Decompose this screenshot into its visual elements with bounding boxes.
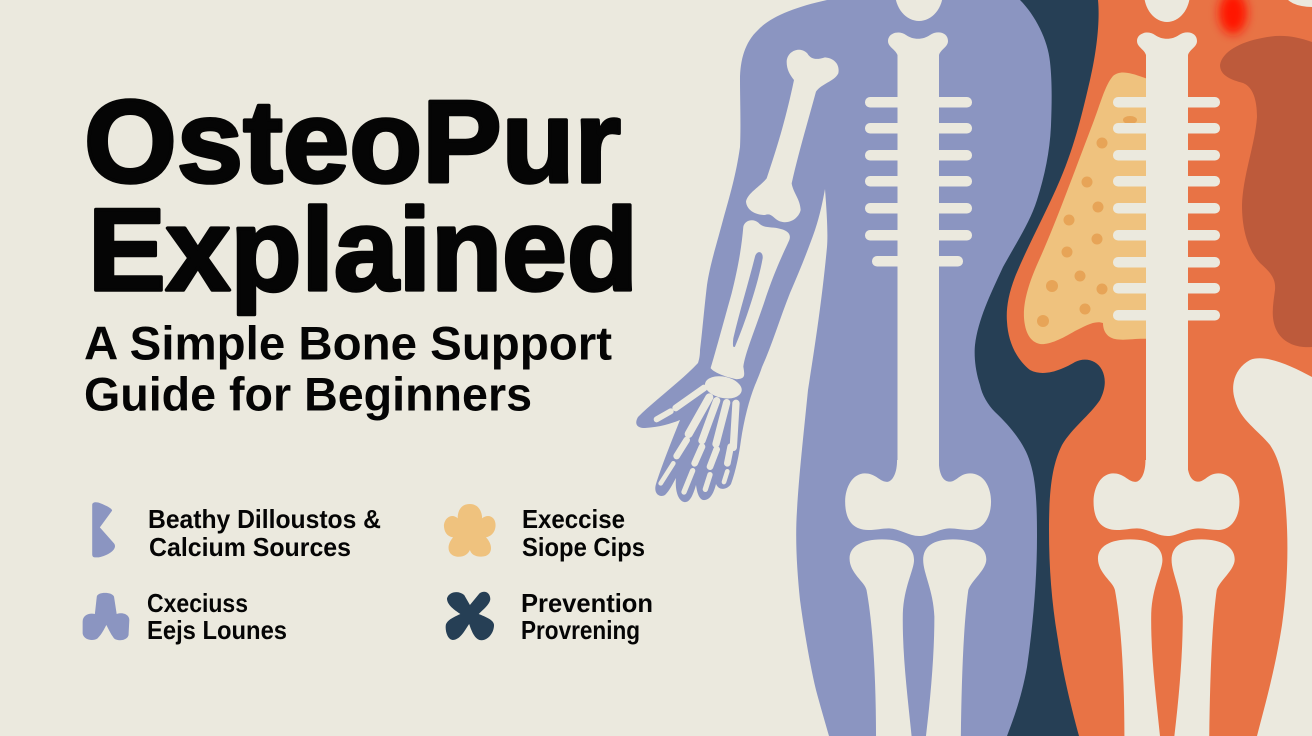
brown organ shape xyxy=(1220,36,1312,347)
orange ribs xyxy=(1113,97,1220,320)
red inflammation glow xyxy=(1219,0,1247,34)
label: exercise lounes xyxy=(147,588,287,645)
yellow porous bone area xyxy=(1024,73,1150,344)
blue spine xyxy=(888,32,948,480)
icon: blue notched shape xyxy=(92,502,115,557)
label: exercise lounes: Cxeciuss xyxy=(147,588,248,618)
label: exercise lounes: Eejs Lounes xyxy=(147,615,287,645)
label: prevention: Provrening xyxy=(521,615,640,645)
item: prevention xyxy=(446,588,653,645)
item: diet and calcium xyxy=(92,502,381,562)
label: exercise tips: Siope Cips xyxy=(522,532,645,562)
blue knee and leg bones xyxy=(845,460,991,736)
icon: yellow flower xyxy=(444,504,496,557)
orange silhouette xyxy=(1007,0,1312,736)
label: exercise tips xyxy=(522,504,645,562)
dark gap between bodies xyxy=(970,0,1110,736)
feature list xyxy=(83,502,653,645)
item: exercise lounes xyxy=(83,588,287,645)
label: prevention xyxy=(521,588,653,645)
figure: orange body with skeleton xyxy=(1007,0,1312,736)
label: diet and calcium xyxy=(148,504,381,562)
blue silhouette xyxy=(636,0,1052,736)
icon: blue arch xyxy=(83,593,129,640)
blue head xyxy=(895,0,943,21)
porous dots xyxy=(1037,116,1137,327)
subtitle: A Simple Bone Support xyxy=(84,316,612,370)
orange knee and leg bones xyxy=(1094,460,1239,736)
title: OsteoPur xyxy=(84,76,621,207)
title xyxy=(84,76,638,315)
label: diet and calcium: Calcium Sources xyxy=(149,532,351,562)
orange spine xyxy=(1137,32,1197,480)
blue ribs xyxy=(865,97,972,266)
subtitle: Guide for Beginners xyxy=(84,368,532,420)
item: exercise tips xyxy=(444,504,645,562)
shoulder blob xyxy=(1285,0,1312,7)
arm bones xyxy=(711,50,839,379)
label: prevention: Prevention xyxy=(521,588,653,618)
label: diet and calcium: Beathy Dilloustos & xyxy=(148,504,381,534)
orange head xyxy=(1144,0,1190,22)
subtitle xyxy=(84,316,612,420)
title: Explained xyxy=(88,184,638,315)
hand bones xyxy=(657,373,744,492)
figure: blue body with skeleton xyxy=(636,0,1052,736)
label: exercise tips: Execcise xyxy=(522,504,625,534)
icon: dark cross xyxy=(446,592,494,640)
